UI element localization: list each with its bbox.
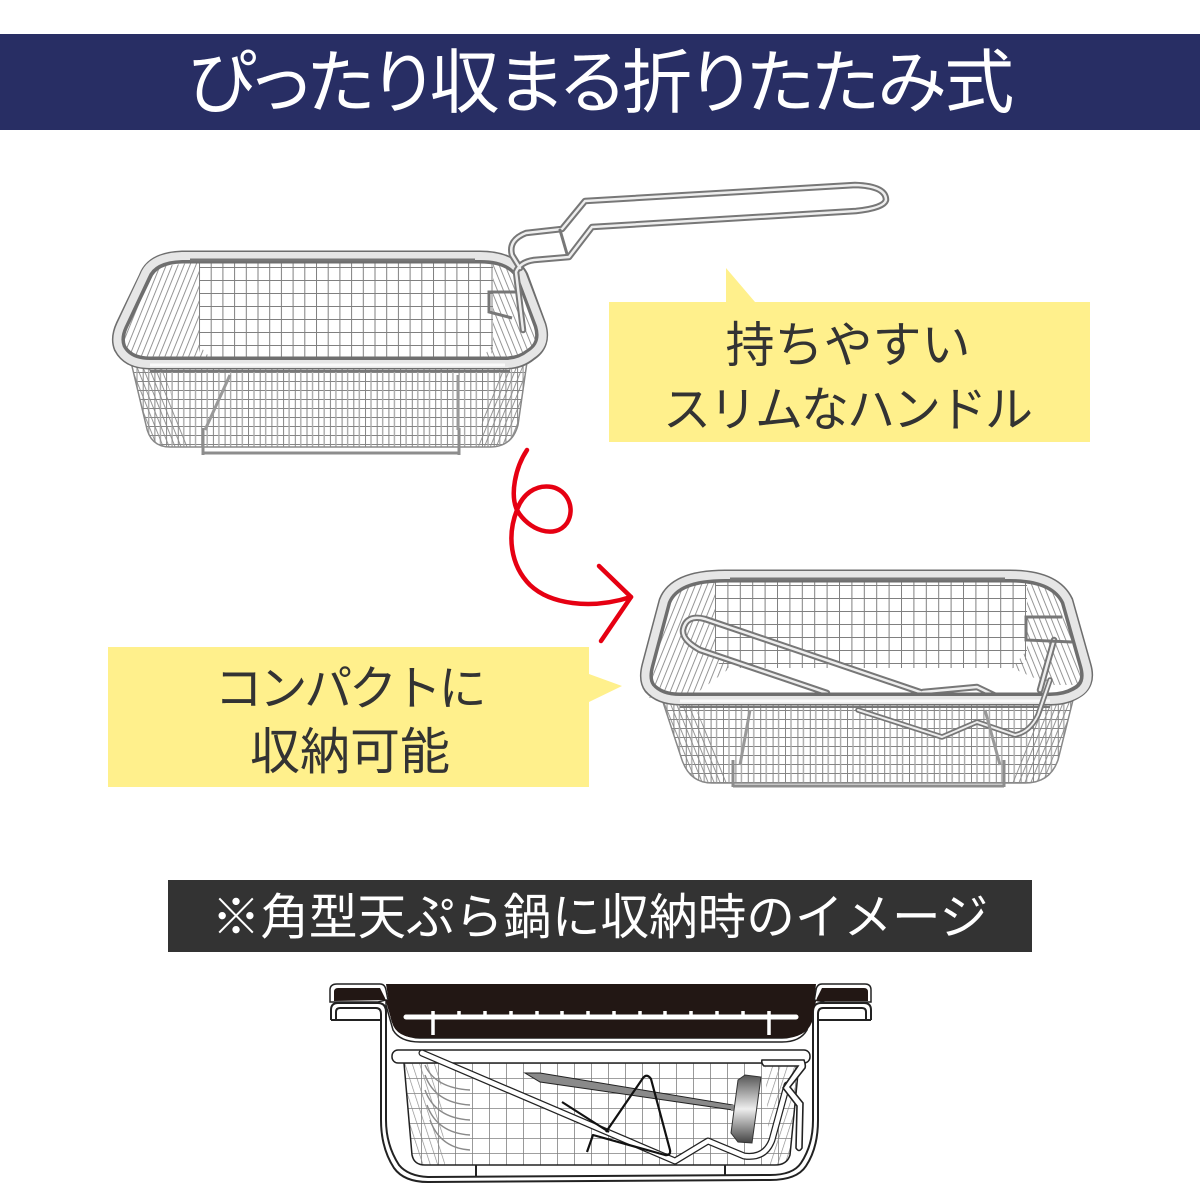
folding handle bbox=[511, 185, 886, 330]
caption text: ※角型天ぷら鍋に収納時のイメージ bbox=[212, 891, 988, 945]
curved mesh lines bbox=[425, 1065, 470, 1150]
feet bar bbox=[203, 375, 459, 455]
basket with handle extended bbox=[117, 185, 886, 455]
hook bracket bbox=[1026, 617, 1072, 642]
callout: slim handle bbox=[609, 268, 1090, 442]
hook bracket bbox=[489, 292, 520, 318]
rim bbox=[645, 575, 1088, 707]
callout: compact storage bbox=[108, 647, 622, 787]
folded handle upper part bbox=[683, 618, 1054, 698]
folded handle lower part bbox=[858, 680, 1050, 737]
basket rim bbox=[392, 1050, 810, 1063]
thermometer bbox=[525, 1073, 733, 1110]
rim bbox=[117, 256, 543, 371]
callout text line 2: 収納可能 bbox=[250, 724, 450, 780]
pan cross-section illustration bbox=[330, 984, 871, 1182]
feet bar bbox=[733, 710, 1004, 787]
basket with handle folded bbox=[645, 575, 1088, 787]
callout text line 1: コンパクトに bbox=[215, 663, 483, 716]
title banner bbox=[0, 34, 1200, 130]
side walls mesh bbox=[122, 262, 214, 362]
upper pan dark bbox=[330, 984, 871, 1042]
callout text line 2: スリムなハンドル bbox=[663, 384, 1031, 437]
inner basket mesh bbox=[404, 1063, 799, 1165]
back wall mesh bbox=[199, 262, 493, 362]
front wall mesh bbox=[131, 362, 527, 447]
arrow: red curl bbox=[511, 450, 631, 641]
folded handle bbox=[422, 1053, 787, 1161]
wire stand bbox=[562, 1076, 670, 1155]
callout text line 1: 持ちやすい bbox=[725, 319, 971, 373]
outer pan outline bbox=[331, 1003, 871, 1182]
front wall mesh bbox=[661, 696, 1074, 783]
side walls mesh bbox=[648, 580, 730, 698]
caption bar bbox=[168, 880, 1032, 952]
title text: ぴったり収まる折りたたみ式 bbox=[187, 44, 1013, 122]
white rail with rivets bbox=[406, 1011, 796, 1035]
back wall mesh bbox=[715, 580, 1027, 668]
hook on right bbox=[762, 1060, 805, 1150]
